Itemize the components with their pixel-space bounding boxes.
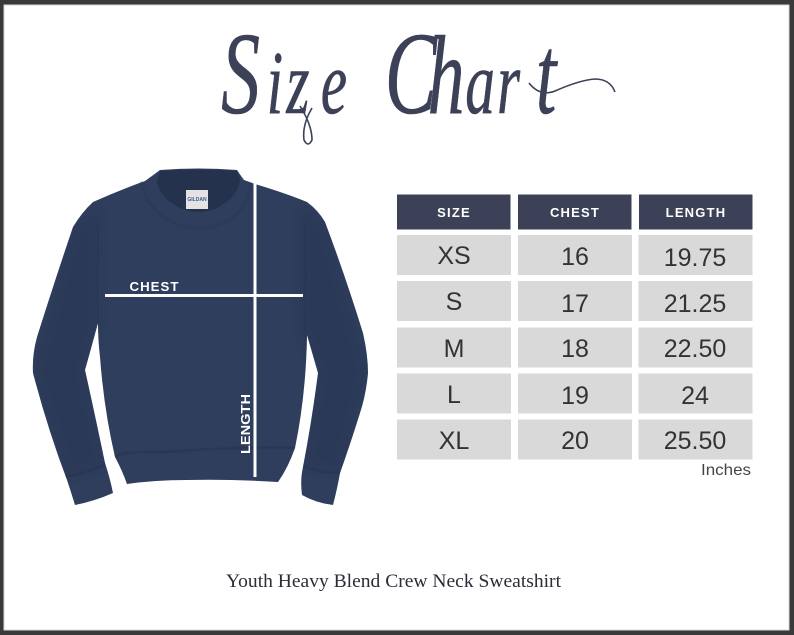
table header — [397, 194, 752, 230]
length label: LENGTH — [238, 394, 253, 454]
title: C — [385, 8, 438, 139]
table row XS: XS — [437, 242, 471, 270]
table row S — [397, 281, 752, 321]
title flourish — [300, 79, 615, 144]
size table — [397, 194, 752, 460]
table row XL: 25.50 — [664, 427, 726, 455]
table row XS — [397, 235, 752, 275]
table row S: S — [446, 288, 462, 316]
neck label — [186, 190, 208, 209]
title — [221, 8, 615, 144]
table row S: 21.25 — [664, 290, 726, 318]
length measurement line — [254, 183, 256, 477]
units note: Inches — [701, 462, 751, 479]
table row L — [397, 374, 752, 414]
caption: Youth Heavy Blend Crew Neck Sweatshirt — [226, 571, 562, 592]
title: e — [321, 34, 347, 133]
table row L: 24 — [681, 382, 709, 410]
title: S — [221, 8, 260, 139]
table row XL: 20 — [561, 427, 589, 455]
table header: LENGTH — [666, 205, 726, 220]
title: a — [465, 34, 495, 133]
title: i — [267, 34, 283, 133]
chest measurement line — [105, 294, 303, 297]
table row M: 22.50 — [664, 335, 726, 363]
table row S: 17 — [561, 290, 589, 318]
sweatshirt shading — [33, 210, 368, 480]
neck label: GILDAN — [187, 197, 207, 203]
table row M: M — [444, 335, 464, 363]
sweatshirt body — [33, 168, 368, 505]
table row L: 19 — [561, 382, 589, 410]
collar inner neck — [157, 170, 240, 212]
table row M: 18 — [561, 335, 589, 363]
table row XL — [397, 420, 752, 460]
table header: SIZE — [437, 205, 471, 220]
title: z — [286, 34, 310, 133]
table header: CHEST — [550, 205, 600, 220]
chest label: CHEST — [130, 279, 180, 294]
sweatshirt illustration — [33, 168, 368, 505]
table row L: L — [447, 381, 461, 409]
table row XL: XL — [439, 427, 469, 455]
title: h — [428, 13, 465, 138]
table row XS: 19.75 — [664, 244, 726, 272]
title: t — [536, 13, 559, 138]
collar rib — [141, 182, 251, 229]
table row M — [397, 328, 752, 368]
table row XS: 16 — [561, 243, 589, 271]
title: r — [497, 34, 520, 133]
